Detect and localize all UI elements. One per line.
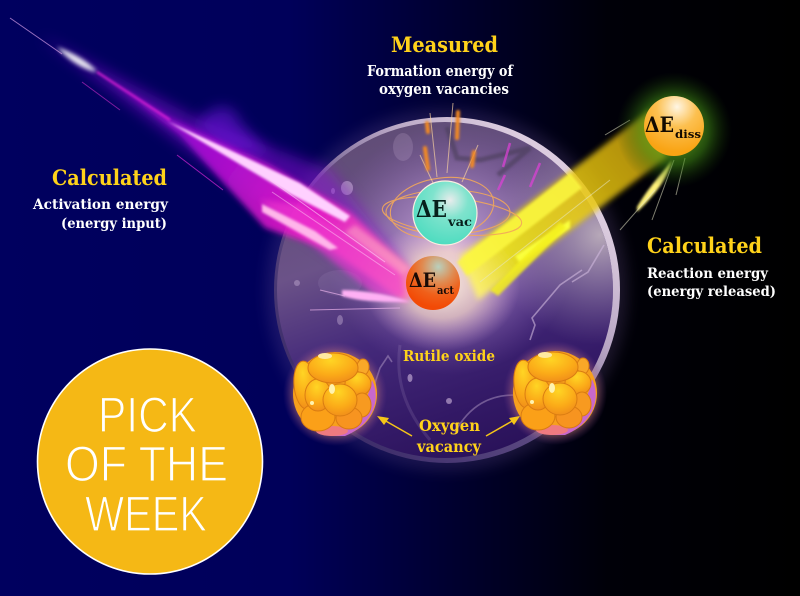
sphere: dissociation energy bbox=[644, 96, 704, 156]
text: activation energy bbox=[32, 197, 169, 232]
sphere: activation energy bbox=[406, 256, 460, 310]
glow: central impact bbox=[364, 219, 520, 351]
heading: calculated activation: Calculated bbox=[52, 165, 167, 190]
badge: pick of the week: PICK bbox=[98, 387, 197, 443]
text: activation energy: Activation energy bbox=[32, 197, 169, 213]
heading: calculated activation bbox=[32, 165, 169, 232]
sphere: vacancy energy: ΔE bbox=[416, 196, 447, 223]
icon: left oxygen vacancy cluster bbox=[283, 342, 387, 446]
heading: measured: Measured bbox=[391, 32, 498, 57]
icon: right oxygen vacancy cluster bbox=[503, 341, 607, 445]
heading: calculated reaction: Calculated bbox=[647, 233, 762, 258]
sphere: vacancy energy: vac bbox=[447, 214, 472, 229]
badge: pick of the week: WEEK bbox=[85, 486, 207, 542]
sphere: dissociation energy: diss bbox=[675, 128, 701, 141]
text: formation energy: oxygen vacancies bbox=[379, 80, 509, 98]
arrow: to right vacancy bbox=[486, 416, 520, 436]
sphere: dissociation energy: ΔE bbox=[645, 112, 674, 137]
panel: rutile oxide disc bbox=[263, 106, 632, 474]
beam: yellow reaction energy bbox=[457, 110, 685, 300]
text: activation energy: (energy input) bbox=[61, 216, 167, 232]
icon: swirl and sparks around vacancy sphere bbox=[381, 103, 540, 245]
text: formation energy: Formation energy of bbox=[367, 62, 514, 80]
text: reaction energy: Reaction energy bbox=[647, 266, 769, 282]
badge: pick of the week: OF THE bbox=[65, 436, 228, 492]
heading: measured bbox=[367, 32, 514, 98]
heading: calculated reaction bbox=[647, 233, 776, 300]
surface cracks and pits bbox=[294, 127, 604, 440]
sphere: activation energy: act bbox=[437, 284, 455, 297]
text: reaction energy: (energy released) bbox=[647, 284, 776, 300]
badge: pick of the week bbox=[38, 349, 262, 574]
text: reaction energy bbox=[647, 266, 776, 300]
label: rutile oxide: Rutile oxide bbox=[403, 347, 495, 365]
sphere: activation energy: ΔE bbox=[409, 268, 436, 292]
sphere: vacancy energy bbox=[413, 181, 477, 245]
label: oxygen vacancy bbox=[416, 416, 482, 456]
label: oxygen vacancy: vacancy bbox=[416, 437, 482, 456]
label: oxygen vacancy: Oxygen bbox=[419, 416, 480, 435]
beam: magenta activation energy bbox=[10, 18, 425, 310]
glow: green halo around dissociation sphere bbox=[616, 72, 732, 188]
text: formation energy bbox=[367, 62, 514, 98]
arrow: to left vacancy bbox=[377, 416, 412, 436]
